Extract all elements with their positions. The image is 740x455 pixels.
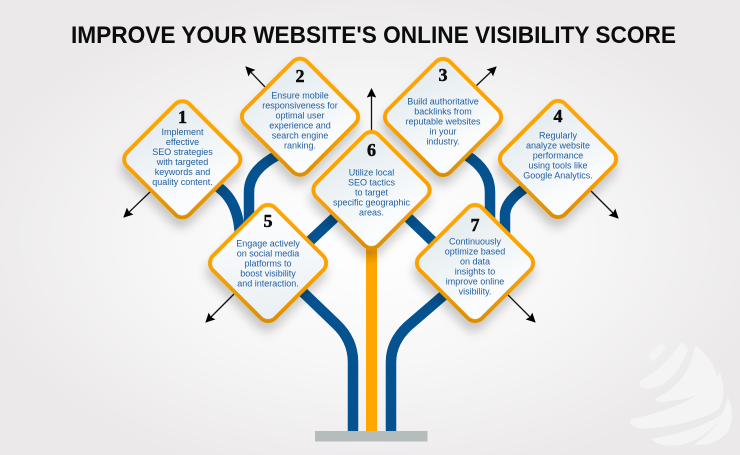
- diamond 1: keywords and: [155, 167, 210, 177]
- diamond 6: Utilize local: [349, 168, 394, 178]
- diamond 3: industry.: [426, 136, 460, 146]
- diamond 2: Ensure mobile: [271, 90, 329, 100]
- watermark globe: [630, 342, 732, 446]
- diamond 7: improve online: [446, 276, 504, 286]
- diamond 4: [496, 97, 620, 221]
- diamond 7: insights to: [455, 266, 495, 276]
- diamond 7: visibility.: [459, 286, 491, 296]
- diamond 1: quality content.: [152, 177, 213, 187]
- diamond 3: Build authoritative: [407, 96, 479, 106]
- diamond 3: backlinks from: [414, 106, 472, 116]
- diamond 1: effective: [166, 137, 199, 147]
- arrow 7: [508, 295, 535, 322]
- diamond 7: Continuously: [449, 236, 502, 246]
- diamond 1: 1: [178, 107, 187, 127]
- diamond 1: SEO strategies: [152, 147, 213, 157]
- diamond 2: [238, 54, 362, 179]
- diamond 5: platforms to: [244, 258, 292, 268]
- diamond 1: with targeted: [156, 157, 208, 167]
- diamond 4: performance: [533, 150, 583, 160]
- diamond 5: boost visibility: [240, 268, 296, 278]
- title: IMPROVE YOUR WEBSITE'S ONLINE VISIBILITY SCORE: [71, 22, 676, 49]
- base: [315, 431, 428, 442]
- orange trunk: [366, 240, 377, 431]
- arrow 6: [370, 89, 372, 131]
- arrow 3: [476, 67, 496, 86]
- diamond 2: search engine: [272, 130, 328, 140]
- arrow 2: [246, 67, 266, 88]
- diamond 4: 4: [554, 106, 562, 126]
- diamond 7: [413, 201, 537, 325]
- diamond 5: Engage actively: [236, 238, 300, 248]
- diamond 6: areas.: [359, 208, 384, 218]
- diamond 5: on social media: [237, 248, 299, 258]
- diamond 5: and interaction.: [237, 278, 299, 288]
- arrow 1: [124, 191, 151, 217]
- diamond 7: 7: [470, 215, 480, 235]
- diamond 6: specific geographic: [333, 198, 411, 208]
- diamond 3: 3: [438, 65, 448, 85]
- diamond 4: Google Analytics.: [523, 170, 593, 180]
- diamond 6: 6: [367, 140, 376, 160]
- diamond 2: optimal user: [275, 110, 325, 120]
- diamond 4: Regularly: [539, 130, 578, 140]
- diamond 1: Implement: [161, 127, 204, 137]
- diamond 1: [120, 97, 245, 222]
- arrow 5: [206, 291, 237, 322]
- diamond 2: 2: [296, 66, 304, 86]
- diamond 6: to target: [355, 188, 389, 198]
- tree trunk and branches: [215, 155, 530, 431]
- diamond 5: 5: [264, 211, 272, 231]
- diamond 5: [206, 201, 330, 325]
- diamond 3: in your: [429, 126, 457, 136]
- diamond 4: analyze website: [526, 140, 590, 150]
- diamond 3: reputable websites: [405, 116, 481, 126]
- diamond 4: using tools like: [528, 160, 588, 170]
- diamond 2: responsiveness for: [262, 100, 338, 110]
- blue branches: [215, 155, 530, 431]
- diamond 6: [309, 128, 434, 252]
- diamond 2: experience and: [269, 120, 331, 130]
- arrows: [124, 67, 618, 322]
- diamond 7: on data: [460, 256, 490, 266]
- diamond 7: optimize based: [445, 246, 505, 256]
- arrow 4: [591, 191, 618, 218]
- diamond 6: SEO tactics: [348, 178, 396, 188]
- diamond 2: ranking.: [284, 140, 316, 150]
- diamond 3: [381, 55, 505, 179]
